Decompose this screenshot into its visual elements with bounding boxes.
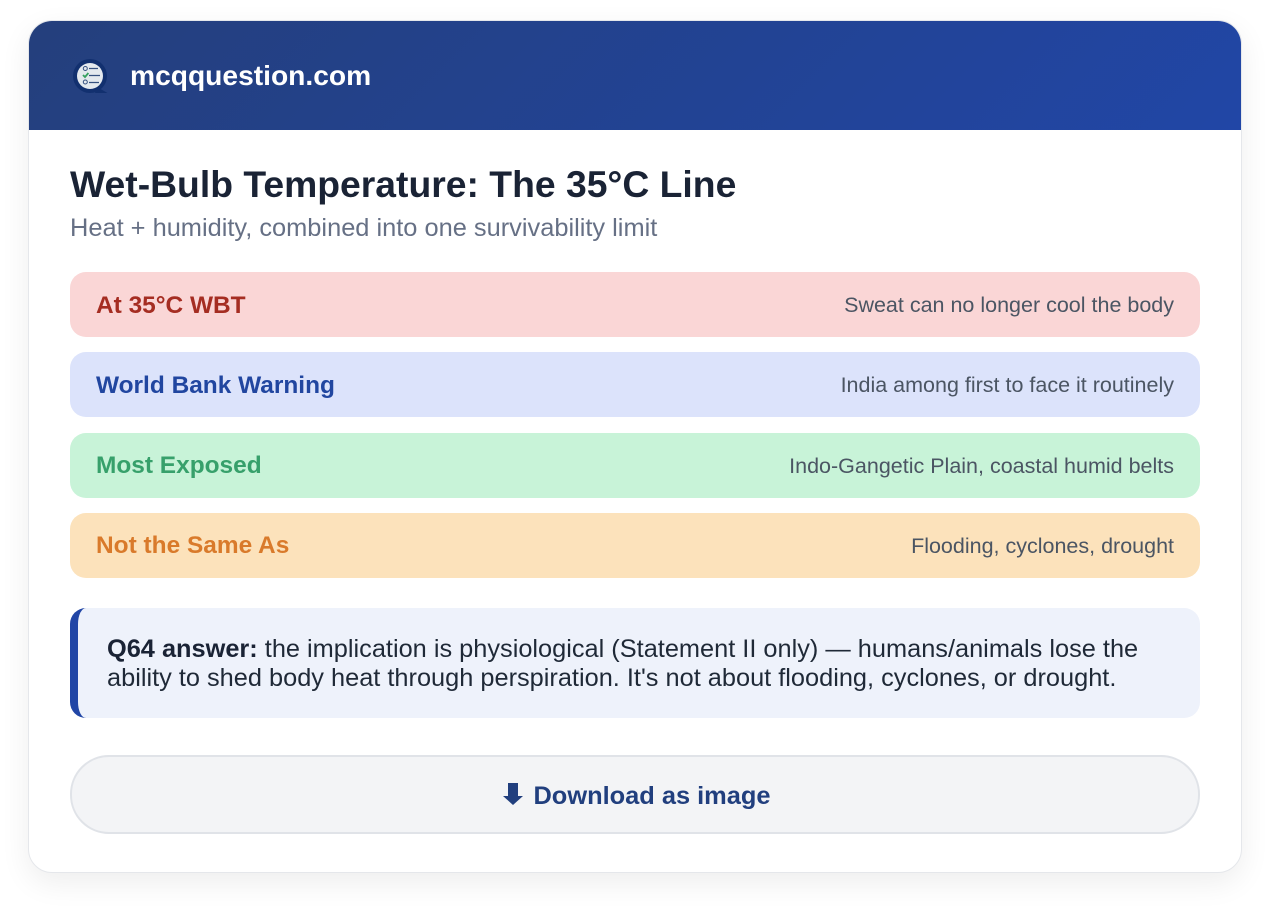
row: World Bank warning [70, 352, 1200, 417]
row: World Bank warning: World Bank Warning [96, 372, 335, 399]
row: most exposed: Indo-Gangetic Plain, coastal humid belts [789, 454, 1174, 478]
answer callout: ability to shed body heat through perspiration. It's not about flooding, cyclones, or drought. [107, 664, 1116, 692]
row: most exposed: Most Exposed [96, 452, 262, 479]
row: at 35C WBT: Sweat can no longer cool the body [844, 293, 1174, 317]
row: not the same as: Not the Same As [96, 532, 289, 559]
subtitle: Heat + humidity, combined into one survivability limit [70, 214, 657, 242]
header band [29, 21, 1241, 130]
row: not the same as: Flooding, cyclones, drought [911, 534, 1174, 558]
row: at 35C WBT [70, 272, 1200, 337]
answer callout: Q64 answer: the implication is physiological (Statement II only) — humans/animals lose the [107, 635, 1138, 663]
row: most exposed [70, 433, 1200, 498]
download button: Download as image [533, 782, 771, 810]
title: Wet-Bulb Temperature: The 35°C Line [70, 163, 736, 205]
row: at 35C WBT: At 35°C WBT [96, 292, 246, 319]
row: not the same as [70, 513, 1200, 578]
answer callout [70, 608, 1200, 718]
row: World Bank warning: India among first to face it routinely [841, 373, 1174, 397]
download button [70, 755, 1200, 834]
brand name: mcqquestion.com [130, 59, 371, 91]
icon: mcqquestion logo [73, 59, 107, 93]
